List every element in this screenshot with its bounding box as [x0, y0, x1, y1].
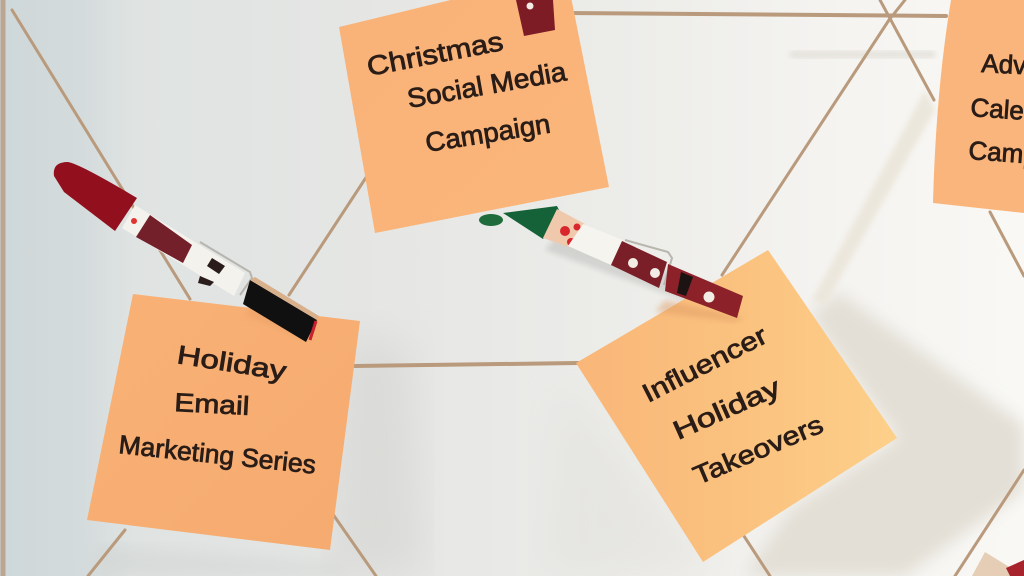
clothespin: green hat snowman: [479, 206, 742, 320]
note text: Holiday: [175, 339, 288, 386]
note text: [364, 26, 570, 158]
note text: Email: [174, 387, 250, 421]
sticky note: Advent Calendar Campaign (cropped): [933, 0, 1024, 213]
note text: [637, 320, 827, 491]
note text: Marketing Series: [117, 429, 317, 480]
clothespin: bottom right corner: [972, 552, 1024, 576]
note text: [968, 48, 1024, 170]
cast shadows on the wall: [745, 51, 1024, 576]
sticky note: Influencer Holiday Takeovers: [576, 250, 897, 562]
clothespin tip over note: [665, 264, 743, 318]
note text: Holiday: [668, 372, 785, 445]
clip on top note: [516, 0, 555, 36]
note text: Social Media: [405, 56, 570, 114]
sticky note: Christmas Social Media Campaign: [339, 0, 609, 233]
note text: Christmas: [364, 26, 506, 82]
note text: Influencer: [637, 320, 772, 408]
note text: [117, 339, 317, 480]
clothespin: red hat figure: [54, 162, 319, 342]
note text: Takeovers: [689, 409, 827, 491]
sticky note: Holiday Email Marketing Series: [87, 294, 360, 550]
note text: Campaign: [423, 109, 552, 158]
